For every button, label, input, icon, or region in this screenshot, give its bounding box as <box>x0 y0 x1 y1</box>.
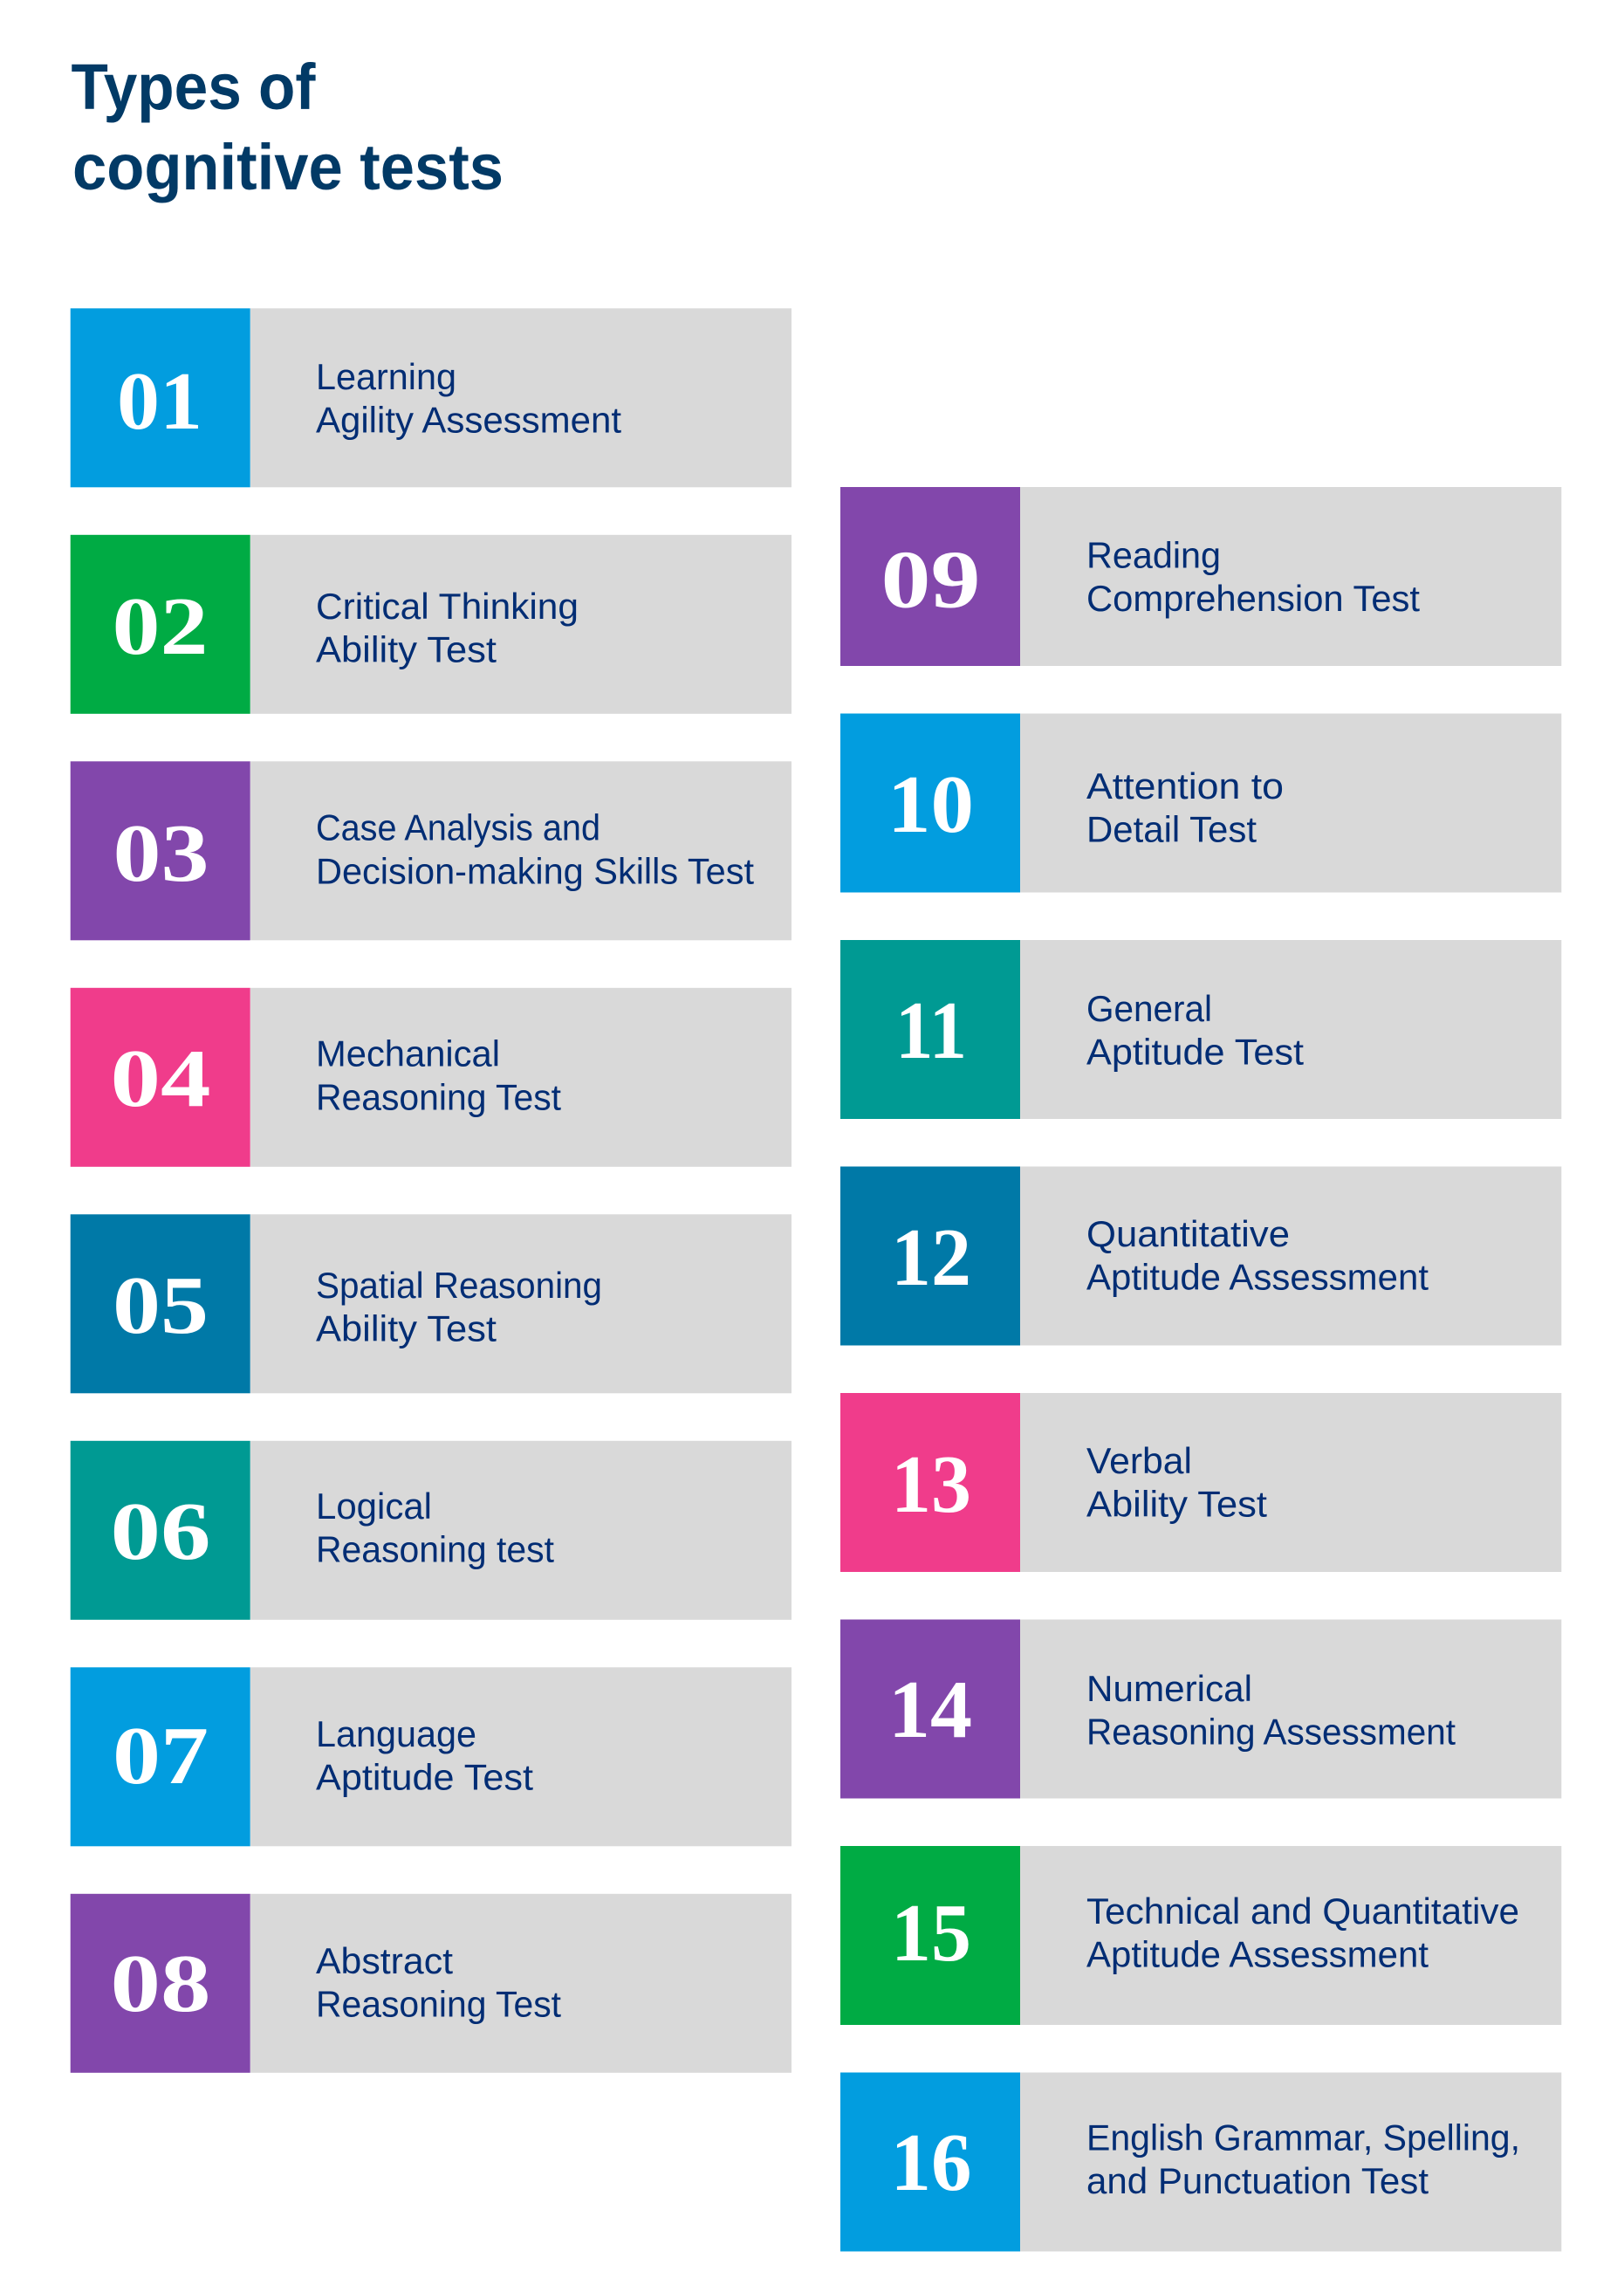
label: test 10: Detail Test <box>1086 808 1257 850</box>
label: test 07 <box>316 1713 533 1798</box>
label: test 03: Decision-making Skills Test <box>316 850 754 892</box>
panel: test 08 <box>71 1894 791 2073</box>
label: test 02: Critical Thinking <box>316 586 579 627</box>
number badge: 01 <box>71 308 250 487</box>
label: test 14 <box>1086 1668 1456 1753</box>
number badge: 15: 15 <box>891 1888 971 1979</box>
number badge: 12 <box>840 1166 1020 1346</box>
label: test 02: Ability Test <box>316 628 497 670</box>
number badge: 02: 02 <box>112 581 208 672</box>
label: test 09 <box>1086 534 1420 619</box>
number badge: 07: 07 <box>113 1711 209 1801</box>
label: test 04: Reasoning Test <box>316 1077 561 1117</box>
label: test 04: Mechanical <box>316 1033 500 1074</box>
label: test 16: and Punctuation Test <box>1086 2160 1429 2201</box>
title <box>72 51 504 203</box>
number badge: 11 <box>840 940 1020 1119</box>
label: test 16: English Grammar, Spelling, <box>1086 2117 1520 2158</box>
label: test 08 <box>316 1940 561 2025</box>
label: test 11: Aptitude Test <box>1086 1032 1304 1072</box>
panel: test 02 <box>71 535 791 714</box>
number badge: 12: 12 <box>891 1212 971 1303</box>
label: test 03 <box>316 806 754 892</box>
number badge: 07 <box>71 1667 250 1846</box>
label: test 14: Numerical <box>1086 1668 1252 1709</box>
number badge: 03 <box>71 761 250 940</box>
label: test 15: Aptitude Assessment <box>1086 1934 1429 1974</box>
number badge: 05 <box>71 1214 250 1393</box>
label: test 04 <box>316 1033 561 1117</box>
label: test 09: Comprehension Test <box>1086 578 1420 619</box>
label: test 01 <box>316 356 621 440</box>
panel: test 10 <box>840 714 1561 892</box>
label: test 08: Reasoning Test <box>316 1983 561 2025</box>
number badge: 05: 05 <box>113 1260 209 1351</box>
label: test 05: Spatial Reasoning <box>316 1265 602 1306</box>
panel: test 14 <box>840 1620 1561 1798</box>
label: test 15 <box>1086 1891 1519 1974</box>
label: test 09: Reading <box>1086 534 1221 576</box>
label: test 07: Language <box>316 1713 476 1754</box>
label: test 07: Aptitude Test <box>316 1756 533 1798</box>
panel: test 16 <box>840 2072 1561 2252</box>
panel: test 03 <box>71 761 791 940</box>
label: test 10: Attention to <box>1086 765 1284 806</box>
number badge: 10 <box>840 714 1020 892</box>
panel: test 12 <box>840 1166 1561 1346</box>
panel: test 04 <box>71 988 791 1167</box>
number badge: 16: 16 <box>890 2117 972 2208</box>
label: test 13: Verbal <box>1086 1440 1192 1481</box>
label: test 05 <box>316 1265 602 1349</box>
panel: test 05 <box>71 1214 791 1393</box>
number badge: 01: 01 <box>117 356 202 447</box>
title: Types of <box>72 51 316 123</box>
label: test 11: General <box>1086 988 1212 1029</box>
label: test 12 <box>1086 1213 1429 1297</box>
number badge: 09 <box>840 487 1020 666</box>
number badge: 04 <box>71 988 250 1167</box>
title: cognitive tests <box>72 131 504 203</box>
number badge: 16 <box>840 2072 1020 2252</box>
panel: test 11 <box>840 940 1561 1119</box>
number badge: 08: 08 <box>110 1939 211 2029</box>
number badge: 13 <box>840 1393 1020 1572</box>
number badge: 06: 06 <box>110 1486 211 1577</box>
number badge: 13: 13 <box>891 1439 971 1530</box>
label: test 13: Ability Test <box>1086 1484 1267 1524</box>
label: test 08: Abstract <box>316 1940 453 1981</box>
label: test 10 <box>1086 765 1284 850</box>
label: test 03: Case Analysis and <box>316 806 600 848</box>
number badge: 11: 11 <box>895 985 967 1076</box>
number badge: 09: 09 <box>881 534 981 625</box>
number badge: 08 <box>71 1894 250 2073</box>
panel: test 06 <box>71 1441 791 1620</box>
panel: test 07 <box>71 1667 791 1846</box>
label: test 05: Ability Test <box>316 1307 497 1349</box>
number badge: 14: 14 <box>888 1664 972 1755</box>
number badge: 02 <box>71 535 250 714</box>
label: test 01: Learning <box>316 356 456 397</box>
number badge: 10: 10 <box>887 759 974 850</box>
label: test 14: Reasoning Assessment <box>1086 1711 1456 1753</box>
panel: test 15 <box>840 1846 1561 2025</box>
label: test 11 <box>1086 988 1304 1072</box>
panel: test 01 <box>71 308 791 487</box>
label: test 16 <box>1086 2117 1520 2201</box>
number badge: 03: 03 <box>113 808 209 899</box>
panel: test 13 <box>840 1393 1561 1572</box>
number badge: 14 <box>840 1620 1020 1798</box>
label: test 15: Technical and Quantitative <box>1086 1891 1519 1932</box>
panel: test 09 <box>840 487 1561 666</box>
label: test 01: Agility Assessment <box>316 400 621 440</box>
label: test 02 <box>316 586 579 670</box>
label: test 12: Quantitative <box>1086 1213 1290 1254</box>
number badge: 15 <box>840 1846 1020 2025</box>
number badge: 04: 04 <box>110 1033 211 1124</box>
label: test 06: Logical <box>316 1486 432 1527</box>
label: test 13 <box>1086 1440 1267 1524</box>
number badge: 06 <box>71 1441 250 1620</box>
label: test 06 <box>316 1486 554 1569</box>
label: test 06: Reasoning test <box>316 1529 554 1569</box>
label: test 12: Aptitude Assessment <box>1086 1257 1429 1297</box>
